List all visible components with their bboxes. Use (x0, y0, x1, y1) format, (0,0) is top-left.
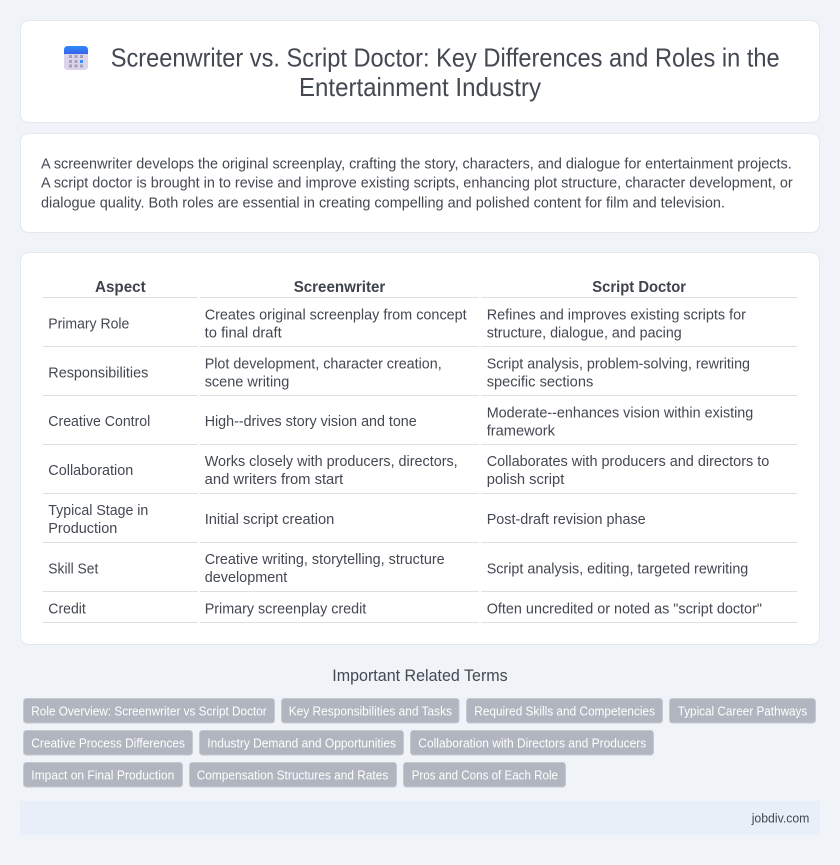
row: skill set: Creative writing, storytelling, structure (205, 552, 445, 568)
intro text: dialogue quality. Both roles are essential in creating compelling and polished content for film and television. (41, 195, 725, 211)
row: typical stage in production: Initial script creation (205, 512, 334, 528)
table header row: Aspect (95, 279, 146, 296)
row: responsibilities: specific sections (487, 374, 593, 390)
row: typical stage in production (48, 503, 646, 537)
related term tags (24, 698, 816, 787)
table header row (95, 279, 686, 296)
row: primary role: Creates original screenplay from concept (205, 307, 467, 323)
footer (20, 801, 820, 835)
table header row: Screenwriter (294, 279, 385, 296)
tag: industry demand: Industry Demand and Opportunities (207, 737, 396, 751)
panel: introduction (20, 134, 820, 232)
row: skill set: development (205, 570, 287, 586)
row: collaboration (48, 454, 769, 488)
row: skill set: Script analysis, editing, targeted rewriting (487, 561, 748, 577)
row: typical stage in production: Post-draft revision phase (487, 512, 646, 528)
title: Screenwriter vs. Script Doctor: Key Differences and Roles in the (111, 45, 780, 73)
row: collaboration: and writers from start (205, 472, 343, 488)
panel: title header (20, 20, 820, 122)
row: primary role: to final draft (205, 325, 282, 341)
row: creative control: Moderate--enhances vision within existing (487, 406, 753, 422)
row: collaboration: Collaborates with producers and directors to (487, 454, 769, 470)
intro text: A screenwriter develops the original screenplay, crafting the story, characters, and dialogue for entertainment projects. (41, 156, 792, 172)
intro text (41, 156, 793, 211)
row: credit (48, 601, 762, 617)
row: typical stage in production: Typical Stage in (48, 503, 148, 519)
tag: impact (24, 762, 182, 787)
row: creative control: Creative Control (48, 414, 150, 430)
tag: pros and cons: Pros and Cons of Each Role (412, 769, 558, 783)
row: primary role: Primary Role (48, 316, 129, 332)
row: responsibilities: Responsibilities (48, 365, 148, 381)
row: collaboration: Collaboration (48, 463, 133, 479)
tag: compensation (190, 762, 396, 787)
row: primary role: Refines and improves existing scripts for (487, 307, 746, 323)
intro text: A script doctor is brought in to revise and improve existing scripts, enhancing plot structure, character development, or (41, 176, 793, 192)
tag: compensation: Compensation Structures and Rates (197, 769, 388, 783)
row: creative control: framework (487, 424, 556, 440)
tag: required skills (466, 698, 662, 723)
table header row: Script Doctor (592, 279, 686, 296)
row: responsibilities: Script analysis, problem-solving, rewriting (487, 356, 750, 372)
row: skill set: Skill Set (48, 561, 98, 577)
row: responsibilities: scene writing (205, 374, 289, 390)
row: collaboration: polish script (487, 472, 564, 488)
row: responsibilities: Plot development, character creation, (205, 356, 442, 372)
tag: creative process (24, 730, 192, 755)
tag: pros and cons (404, 762, 566, 787)
title (111, 45, 780, 102)
tag: collaboration (410, 730, 654, 755)
footer: jobdiv.com (751, 811, 809, 825)
icon: calendar (64, 46, 88, 70)
tag: creative process: Creative Process Differences (31, 737, 185, 751)
row: credit: Often uncredited or noted as "script doctor" (487, 601, 762, 617)
tag: industry demand (200, 730, 404, 755)
tag: key responsibilities (282, 698, 459, 723)
row: skill set (48, 552, 748, 586)
tag: key responsibilities: Key Responsibilities and Tasks (289, 705, 452, 719)
row: typical stage in production: Production (48, 521, 117, 537)
tag: career pathways: Typical Career Pathways (678, 705, 807, 719)
row: primary role: structure, dialogue, and pacing (487, 325, 682, 341)
tag: collaboration: Collaboration with Directors and Producers (418, 737, 646, 751)
tag: role overview (24, 698, 274, 723)
row: primary role (48, 307, 746, 341)
tag: required skills: Required Skills and Competencies (474, 705, 655, 719)
row: responsibilities (48, 356, 750, 390)
heading: important related terms: Important Related Terms (332, 667, 508, 685)
title: Entertainment Industry (299, 74, 541, 102)
row: collaboration: Works closely with producers, directors, (205, 454, 458, 470)
row: creative control (48, 406, 753, 440)
tag: impact: Impact on Final Production (31, 769, 174, 783)
row: credit: Credit (48, 601, 86, 617)
tag: role overview: Role Overview: Screenwriter vs Script Doctor (31, 705, 267, 719)
panel: comparison table (20, 252, 820, 644)
tag: career pathways (670, 698, 816, 723)
row: creative control: High--drives story vision and tone (205, 414, 417, 430)
row: credit: Primary screenplay credit (205, 601, 366, 617)
